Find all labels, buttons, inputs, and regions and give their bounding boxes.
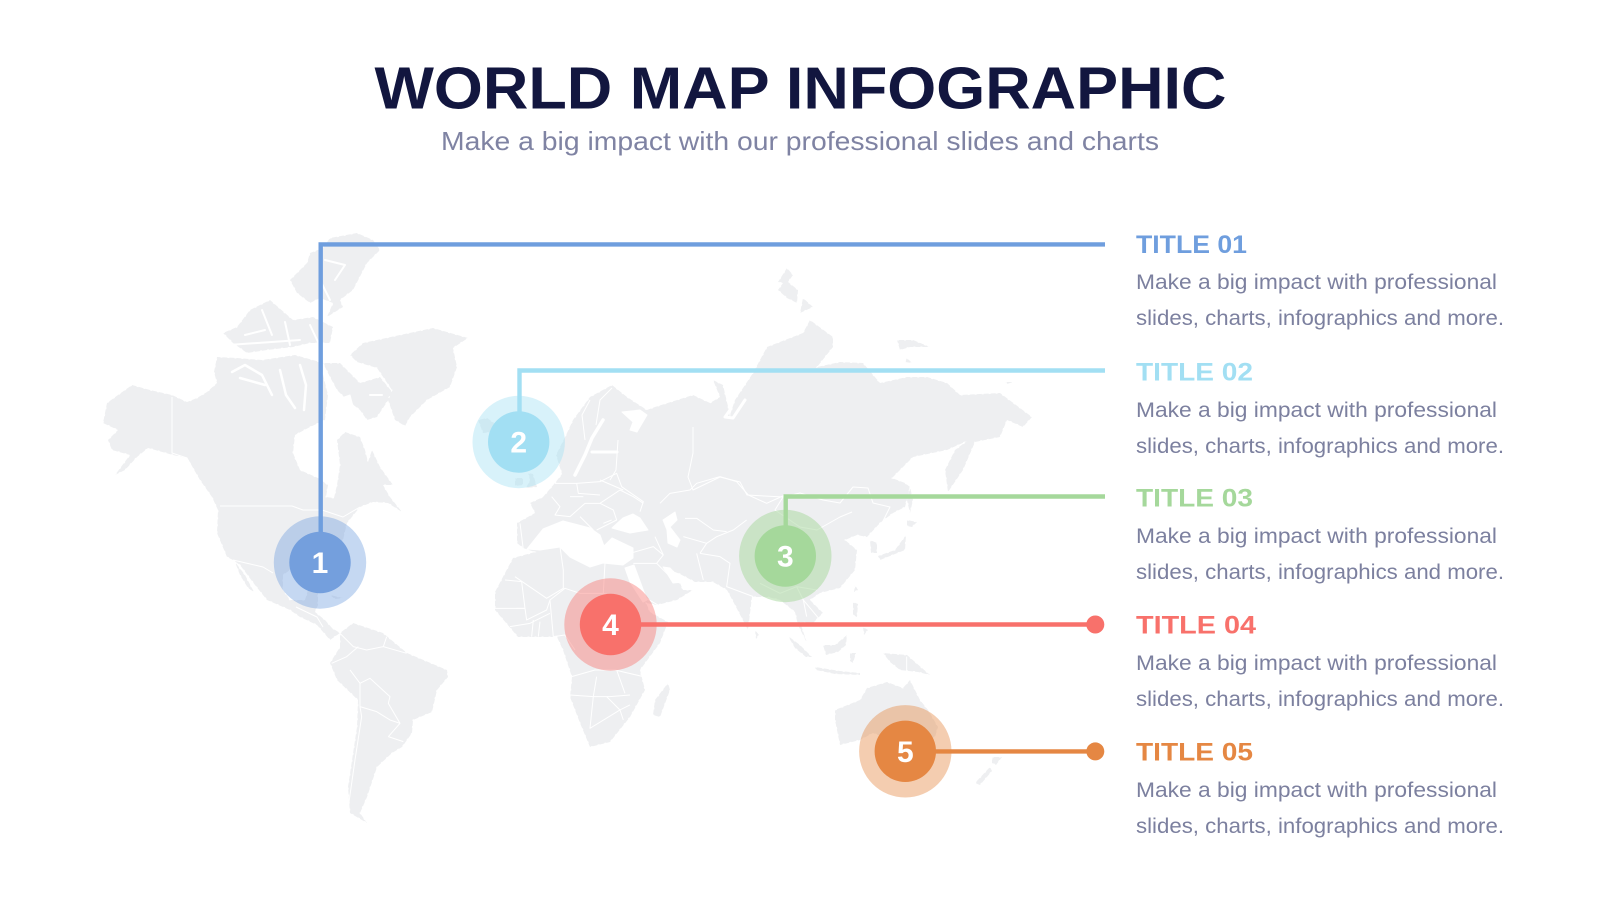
- marker 1: 1: [312, 547, 328, 580]
- text block: title 04: TITLE 04: [1136, 612, 1256, 640]
- text block: title 03: slides, charts, infographics and more.: [1136, 561, 1504, 584]
- text block: title 04: slides, charts, infographics and more.: [1136, 688, 1504, 711]
- marker 4: [564, 578, 657, 671]
- text block: title 03: Make a big impact with professional: [1136, 525, 1497, 548]
- text block: title 04: [1136, 612, 1504, 711]
- leader line 2: [520, 370, 1105, 420]
- text block: title 04: Make a big impact with professional: [1136, 652, 1497, 675]
- subtitle: Make a big impact with our professional slides and charts: [441, 126, 1159, 156]
- text block: title 02: TITLE 02: [1136, 358, 1253, 386]
- marker 3: 3: [777, 540, 794, 574]
- leader line 4: [640, 616, 1104, 634]
- text block: title 02: slides, charts, infographics and more.: [1136, 435, 1504, 458]
- leader line 5: [935, 742, 1104, 760]
- marker 2: 2: [510, 426, 527, 460]
- text block: title 03: TITLE 03: [1136, 484, 1253, 512]
- text block: title 05: [1136, 738, 1504, 838]
- marker 4: 4: [602, 609, 619, 642]
- text block: title 03: [1136, 484, 1504, 584]
- marker 1: [274, 516, 366, 609]
- seas and inlets: [336, 395, 683, 602]
- title: WORLD MAP INFOGRAPHIC: [374, 56, 1226, 122]
- text block: title 05: Make a big impact with professional: [1136, 779, 1497, 802]
- marker 5: 5: [897, 736, 914, 769]
- world map: [103, 233, 1032, 823]
- text block: title 01: slides, charts, infographics and more.: [1136, 307, 1504, 330]
- marker 2: [472, 396, 565, 488]
- marker 3: [739, 510, 832, 602]
- text block: title 01: Make a big impact with professional: [1136, 271, 1497, 294]
- text block: title 01: TITLE 01: [1136, 231, 1247, 259]
- text block: title 01: [1136, 231, 1504, 330]
- text block: title 02: [1136, 358, 1504, 458]
- leader line 3: [786, 496, 1105, 530]
- text block: title 05: slides, charts, infographics and more.: [1136, 815, 1504, 838]
- country borders: [172, 388, 907, 807]
- leader line 1: [321, 244, 1105, 540]
- marker 5: [859, 705, 952, 798]
- text block: title 05: TITLE 05: [1136, 738, 1253, 766]
- text block: title 02: Make a big impact with professional: [1136, 399, 1497, 422]
